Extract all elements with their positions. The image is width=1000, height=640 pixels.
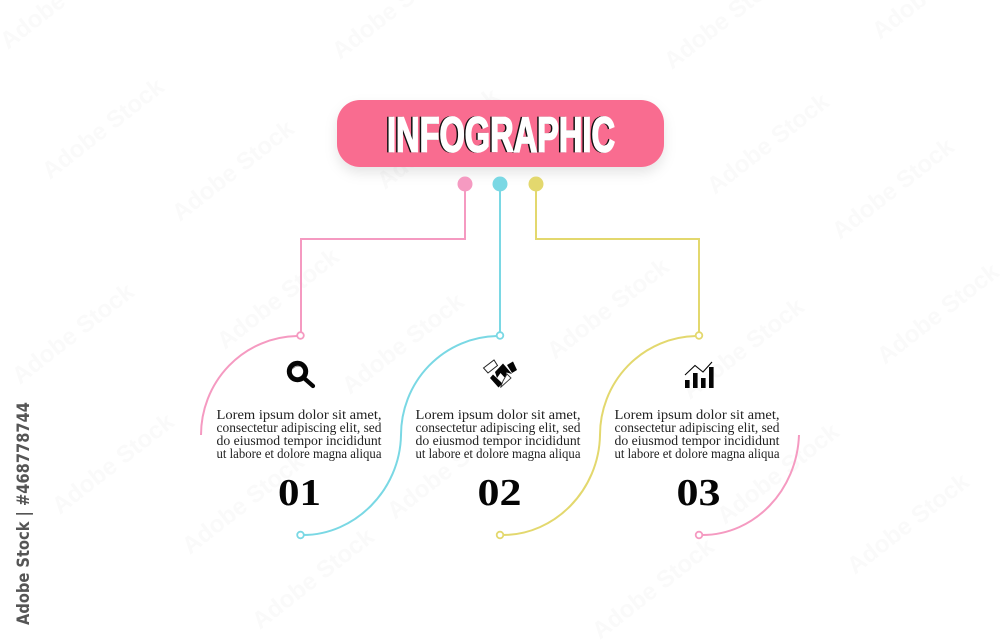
watermark pattern: Adobe Stock	[167, 115, 300, 227]
icon: handshake	[484, 360, 517, 388]
title banner	[337, 100, 664, 167]
watermark pattern: Adobe Stock	[177, 448, 310, 560]
watermark pattern: Adobe Stock	[212, 243, 345, 355]
pink arc top left	[201, 336, 297, 435]
text block 01: do eiusmod tempor incididunt	[216, 433, 382, 448]
text block 03	[614, 407, 780, 461]
node markers	[297, 332, 702, 538]
pink connector	[301, 176, 472, 333]
text block 03: do eiusmod tempor incididunt	[614, 433, 780, 448]
number 01: 01	[278, 472, 321, 514]
cyan connector	[492, 176, 508, 333]
watermark pattern: Adobe Stock	[7, 278, 140, 390]
cyan S-curve	[303, 336, 497, 535]
icon: magnifier	[289, 363, 313, 386]
text block 02: Lorem ipsum dolor sit amet,	[416, 407, 580, 422]
watermark pattern: Adobe Stock	[677, 293, 810, 405]
stock id label: Adobe Stock | #468778744	[14, 402, 34, 625]
text block 02: consectetur adipiscing elit, sed	[416, 420, 581, 435]
text block 02	[416, 407, 581, 461]
text block 01	[216, 407, 382, 461]
yellow connector	[528, 176, 699, 333]
panel: step 02	[416, 360, 581, 514]
watermark pattern: Adobe Stock	[47, 408, 180, 520]
panel: step 03	[614, 362, 780, 514]
watermark pattern: Adobe Stock	[712, 418, 845, 530]
watermark pattern: Adobe Stock	[382, 413, 515, 525]
text block 01: Lorem ipsum dolor sit amet,	[216, 407, 382, 422]
watermark pattern: Adobe Stock	[372, 83, 505, 195]
text block 03: ut labore et dolore magna aliqua	[614, 446, 780, 461]
watermark pattern: Adobe Stock	[842, 468, 975, 580]
text block 02: do eiusmod tempor incididunt	[416, 433, 581, 448]
text block 02: ut labore et dolore magna aliqua	[416, 446, 581, 461]
watermark pattern: Adobe Stock	[247, 523, 380, 635]
panel: step 01	[216, 363, 382, 514]
title shadow: INFOGRAPHIC	[386, 108, 614, 162]
pink arc bottom right	[702, 435, 799, 535]
watermark pattern: Adobe Stock	[542, 253, 675, 365]
text block 03: Lorem ipsum dolor sit amet,	[614, 407, 780, 422]
number 02: 02	[478, 472, 522, 514]
text block 01: consectetur adipiscing elit, sed	[216, 420, 382, 435]
title: INFOGRAPHIC	[387, 108, 615, 162]
text block 03: consectetur adipiscing elit, sed	[614, 420, 780, 435]
watermark pattern: Adobe Stock	[37, 73, 170, 185]
number 03: 03	[676, 472, 720, 514]
text block 01: ut labore et dolore magna aliqua	[216, 446, 382, 461]
watermark pattern: Adobe Stock	[702, 88, 835, 200]
watermark pattern: Adobe Stock	[827, 133, 960, 245]
icon: bar chart	[685, 362, 714, 388]
yellow S-curve	[503, 336, 696, 535]
watermark pattern: Adobe Stock	[337, 288, 470, 400]
